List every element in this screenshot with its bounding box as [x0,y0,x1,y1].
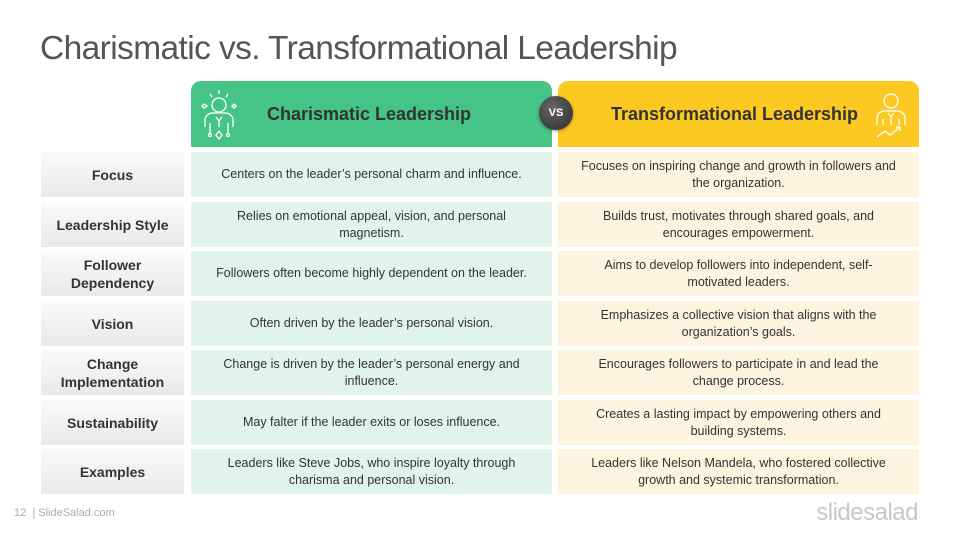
text: Leadership Style [56,216,169,232]
text: Vision [92,316,133,332]
header: charismatic [191,81,552,147]
text: Creates a lasting impact by empowering others and building systems. [596,407,881,438]
title: Charismatic vs. Transformational Leadership [40,30,677,67]
text: Encourages followers to participate in and lead the change process. [598,357,879,388]
footer: logo: slidesalad [816,499,918,526]
text: Implementation [61,374,164,390]
header: transformational [558,81,919,147]
header: transformational: Transformational Leadership [611,104,858,124]
vs badge [539,96,573,130]
text: Examples [80,464,145,480]
text: Leaders like Nelson Mandela, who fostered collective growth and systemic transformation. [591,456,886,486]
text: Emphasizes a collective vision that aligns with the organization’s goals. [601,308,876,338]
text: Focuses on inspiring change and growth in followers and the organization. [581,159,896,190]
text: Sustainability [67,414,158,430]
text: Focus [92,166,133,182]
text: Leaders like Steve Jobs, who inspire loyalty through charisma and personal vision. [228,456,515,486]
text: Change [87,356,138,372]
text: Change is driven by the leader’s personal energy and influence. [223,357,520,388]
row: Leadership Style [41,202,919,247]
text: Builds trust, motivates through shared goals, and encourages empowerment. [603,209,874,240]
vs badge: VS [549,107,563,119]
row: Vision [41,301,919,346]
text: Centers on the leader’s personal charm and influence. [221,167,522,181]
text: Aims to develop followers into independent, self- [604,258,873,272]
text: Often driven by the leader’s personal vision. [250,316,493,330]
row: Follower Dependency [41,251,919,296]
footer: page number: 12 | SlideSalad.com [14,507,115,519]
icon: charismatic leader [201,90,237,140]
row: Change Implementation [41,350,919,395]
header: charismatic: Charismatic Leadership [267,104,471,124]
row: Sustainability [41,400,919,445]
text: May falter if the leader exits or loses influence. [243,415,500,429]
text: motivated leaders. [687,274,790,288]
text: Dependency [71,274,154,290]
text: Followers often become highly dependent on the leader. [216,266,527,280]
text: Relies on emotional appeal, vision, and personal magnetism. [237,209,506,240]
row: Focus [41,152,919,197]
icon: transformational leader [876,93,906,138]
text: Follower [84,256,141,272]
row: Examples [41,449,919,494]
